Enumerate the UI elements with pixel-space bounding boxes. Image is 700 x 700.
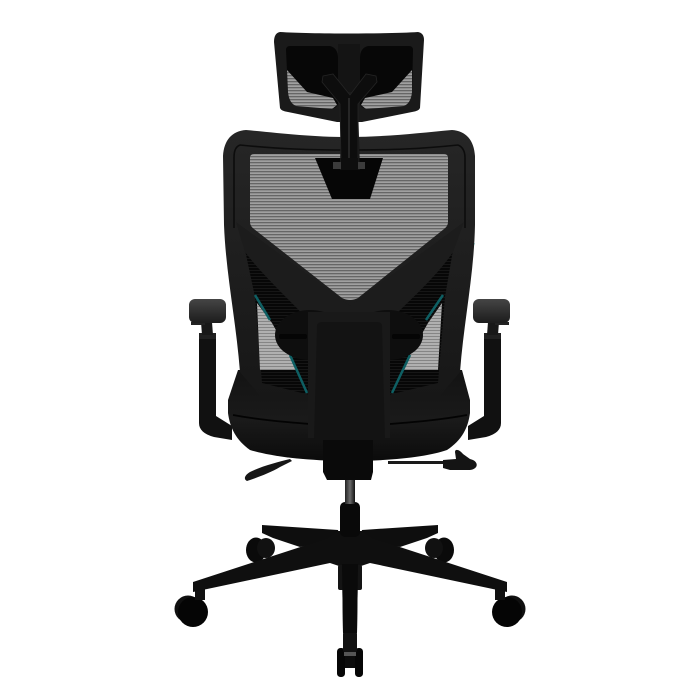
seat cushion [228,370,470,461]
caster: front right [492,588,526,627]
central spine column [308,312,390,440]
caster: front centre [337,632,363,677]
backrest frame [223,130,475,398]
caster: rear left [246,538,275,562]
back support arms [236,222,464,322]
headrest centre bar [338,44,360,92]
back mesh panel [250,154,448,300]
teal accent: upper right [468,243,474,268]
lumbar knob: right [353,310,423,360]
lumbar knob: left [275,310,345,360]
backrest inner frame edge [234,145,465,228]
headrest [274,32,424,122]
armrest: left [189,299,232,440]
lower mesh: right [388,250,453,395]
headrest mesh: right [361,70,412,109]
neck notch in mesh [315,158,383,199]
headrest window: left [286,46,338,108]
headrest frame [274,32,424,122]
caster: front left [174,588,208,627]
tilt lever: right [388,450,477,470]
teal accent: upper left [226,243,232,268]
armrest: right [468,299,510,440]
lower mesh: left [245,250,310,395]
tilt lever: left [245,459,292,481]
seat seam [233,415,467,424]
five-star base [193,525,507,633]
gas lift cylinder [340,478,360,537]
caster: rear right [425,538,454,562]
seat mechanism [323,440,373,480]
headrest bracket [322,74,377,170]
headrest stem [340,105,360,170]
headrest window: right [360,46,413,108]
headrest mesh: left [287,70,337,109]
